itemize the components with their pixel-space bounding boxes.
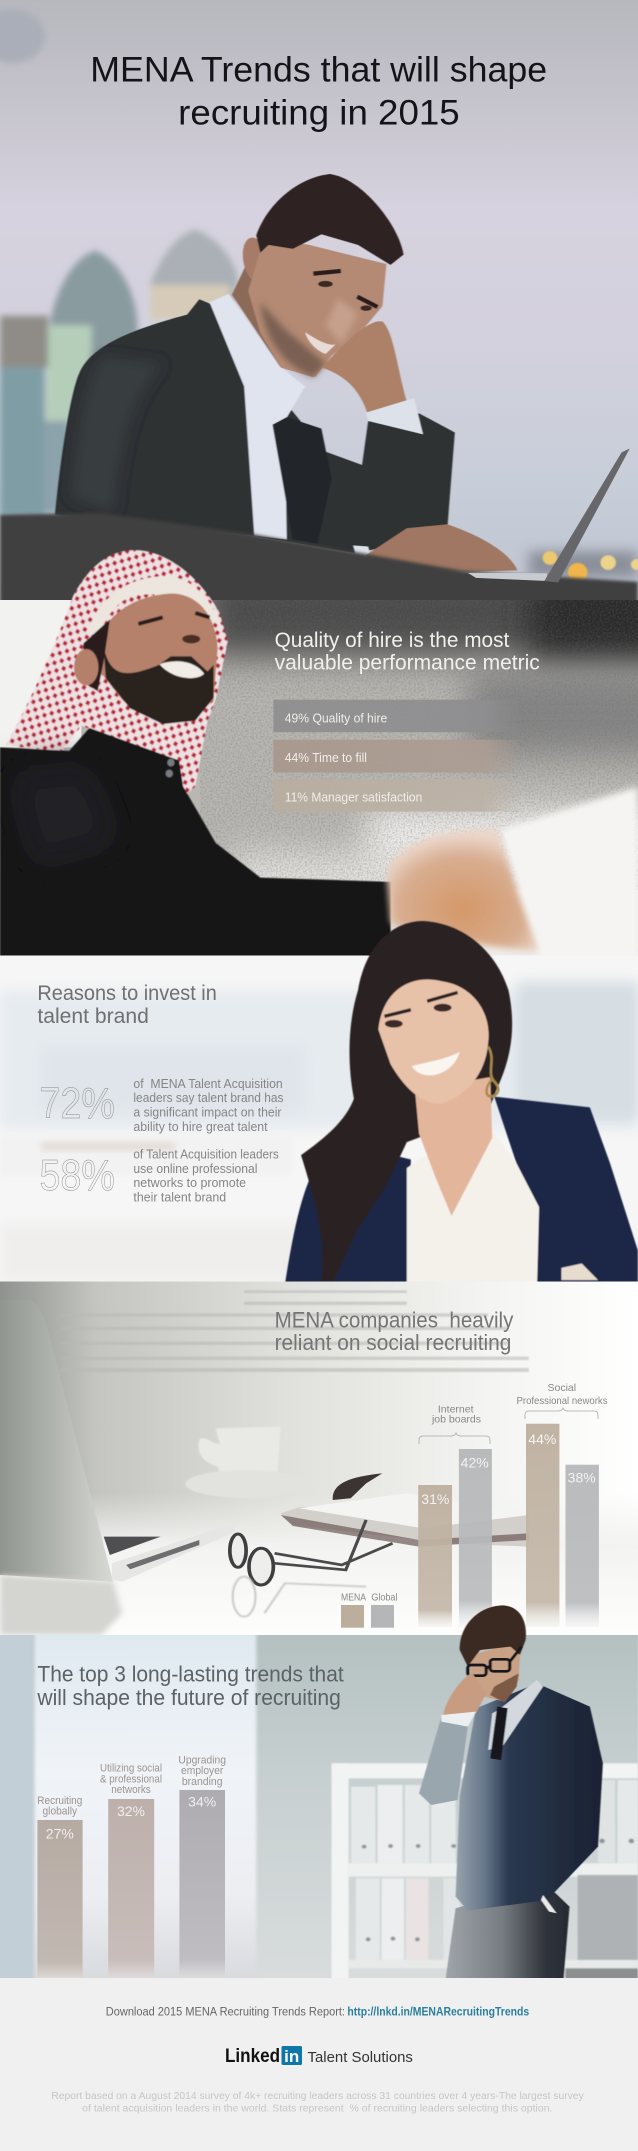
photo: blurred city skyline with domed towers	[0, 10, 238, 517]
chart: performance metric bars: 44% Time to fill	[285, 750, 367, 765]
chart: performance metric bars: 11% Manager satisfaction	[285, 790, 422, 805]
photo: businessman on phone in suit	[419, 1605, 603, 1980]
logo: LinkedIn Talent Solutions: Linked	[225, 2046, 280, 2067]
logo: LinkedIn Talent Solutions: in	[284, 2047, 299, 2066]
chart: top trends bars: 27%	[46, 1825, 74, 1841]
chart: top trends bars: Upgrading	[178, 1754, 226, 1766]
chart: internet job boards vs social professional networks: job boards	[431, 1414, 481, 1426]
legend	[341, 1592, 397, 1628]
stat: 58% of leaders: networks to promote	[133, 1176, 246, 1190]
title: MENA Trends that will shape	[90, 50, 547, 90]
chart: top trends bars: globally	[42, 1806, 78, 1818]
heading: top 3 trends: will shape the future of recruiting	[36, 1685, 341, 1710]
stat: 72% of leaders: a significant impact on their	[133, 1106, 282, 1120]
heading: top 3 trends	[36, 1662, 344, 1710]
chart: top trends bars: networks	[111, 1784, 151, 1796]
chart: top trends bars	[37, 1754, 226, 1978]
chart: performance metric bars	[273, 700, 519, 812]
stat: 72% of leaders: 72%	[40, 1079, 115, 1128]
background: dusk sky	[0, 0, 638, 600]
stat: 72% of leaders: of MENA Talent Acquisition	[133, 1077, 283, 1091]
logo: LinkedIn Talent Solutions	[225, 2046, 413, 2067]
chart: internet job boards vs social professional networks	[341, 1382, 608, 1628]
stat: 58% of leaders	[40, 1148, 279, 1204]
panel: footer	[0, 1978, 638, 2151]
stat: 58% of leaders: their talent brand	[133, 1190, 226, 1204]
stat: 72% of leaders: ability to hire great talent	[133, 1120, 268, 1134]
stat: 58% of leaders: use online professional	[133, 1162, 258, 1176]
photo: desk with laptop, coffee, glasses	[0, 1281, 638, 1647]
stat: 72% of leaders: leaders say talent brand has	[133, 1091, 284, 1105]
chart: internet job boards vs social professional networks: 31%	[421, 1491, 449, 1507]
heading: quality of hire	[275, 629, 540, 674]
chart: top trends bars: 32%	[117, 1803, 145, 1819]
chart: top trends bars: 34%	[188, 1793, 216, 1809]
heading: quality of hire: valuable performance metric	[275, 651, 540, 674]
chart: internet job boards vs social professional networks: 42%	[461, 1454, 489, 1470]
legend: MENA	[341, 1592, 366, 1604]
stat: 58% of leaders: of Talent Acquisition leaders	[133, 1148, 279, 1162]
background: grunge concrete texture	[0, 565, 638, 982]
panel: intro photo section	[0, 0, 638, 628]
panel: quality of hire	[0, 550, 638, 982]
logo: LinkedIn Talent Solutions: Talent Solutions	[308, 2049, 413, 2066]
title: recruiting in 2015	[178, 93, 460, 132]
disclaimer: Report based on a August 2014 survey of 4k+ recruiting leaders across 31 countries over 4 years-The largest survey	[51, 2090, 585, 2102]
heading: reasons to invest in talent brand	[37, 982, 217, 1028]
heading: reasons to invest in talent brand: Reasons to invest in	[37, 982, 217, 1005]
heading: MENA companies heavily reliant: reliant on social recruiting	[275, 1330, 511, 1355]
stat: 72% of leaders	[40, 1077, 284, 1134]
heading: top 3 trends: The top 3 long-lasting trends that	[37, 1662, 344, 1687]
download link text	[106, 2007, 529, 2019]
chart: internet job boards vs social professional networks: Social	[547, 1382, 576, 1394]
stat: 58% of leaders: 58%	[40, 1151, 115, 1200]
legend: Global	[371, 1592, 397, 1604]
photo: dark foreground wall and bokeh lights	[0, 448, 638, 600]
chart: top trends bars: & professional	[100, 1773, 162, 1785]
panel: top 3 long-lasting trends	[0, 1605, 638, 1983]
chart: internet job boards vs social professional networks: 38%	[568, 1469, 596, 1485]
chart: performance metric bars: 49% Quality of hire	[285, 710, 387, 725]
heading: MENA companies heavily reliant	[275, 1307, 513, 1355]
chart: internet job boards vs social professional networks: Professional neworks	[516, 1395, 608, 1407]
title	[90, 50, 547, 132]
chart: internet job boards vs social professional networks: 44%	[528, 1431, 556, 1447]
chart: top trends bars: Recruiting	[37, 1795, 82, 1807]
photo: man in keffiyeh shaking hands	[0, 550, 638, 960]
background: blurred office windows	[8, 980, 638, 1152]
chart: top trends bars: branding	[182, 1776, 223, 1788]
chart: internet job boards vs social professional networks: Internet	[438, 1404, 474, 1416]
panel: reasons to invest in talent brand	[0, 921, 638, 1285]
disclaimer	[51, 2090, 585, 2115]
background: bright office with shelves	[0, 1630, 638, 1983]
heading: MENA companies heavily reliant: MENA companies heavily	[275, 1307, 513, 1332]
download link text: http://lnkd.in/MENARecruitingTrends	[347, 2007, 529, 2019]
photo: smiling businesswoman	[285, 921, 638, 1285]
download link text: Download 2015 MENA Recruiting Trends Report:	[106, 2007, 345, 2019]
chart: top trends bars: Utilizing social	[100, 1763, 162, 1775]
heading: reasons to invest in talent brand: talent brand	[37, 1005, 149, 1028]
heading: quality of hire: Quality of hire is the most	[275, 629, 509, 652]
photo: smiling businessman at laptop	[55, 174, 517, 572]
chart: top trends bars: employer	[181, 1765, 224, 1777]
panel: social recruiting	[0, 1281, 638, 1647]
disclaimer: of talent acquisition leaders in the world. Stats represent % of recruiting leaders selecting this option.	[82, 2103, 552, 2115]
